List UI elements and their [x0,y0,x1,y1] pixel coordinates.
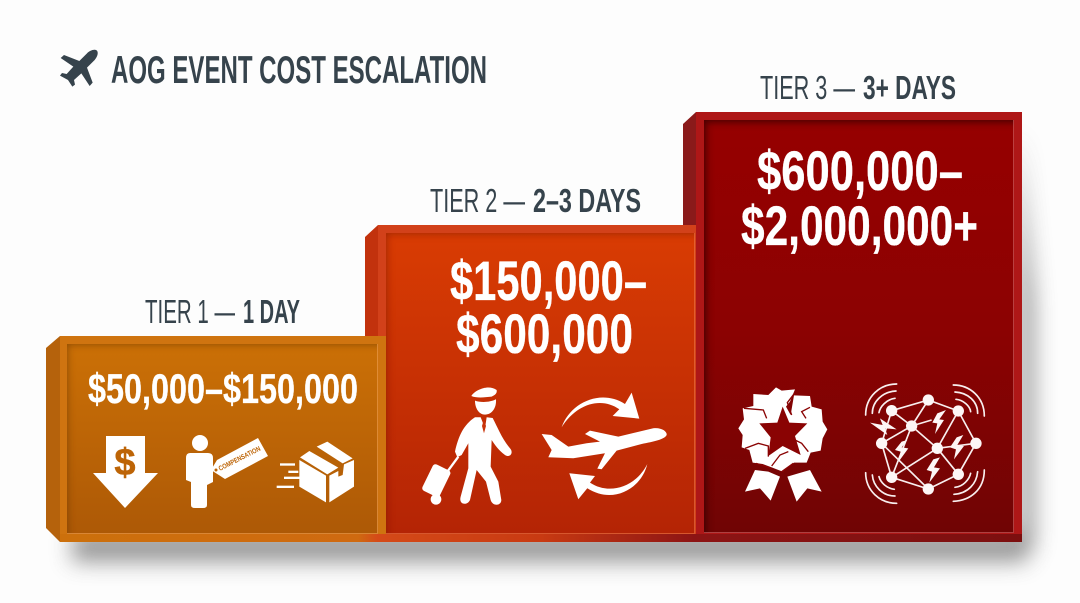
tier 1 frame [60,336,386,542]
icon: shipping box [277,442,354,502]
tier 3 amount: $2,000,000+ [741,194,978,257]
tier 2 amount: $150,000– [450,249,647,312]
drop shadow [72,130,1034,562]
tier 2 frame [378,225,696,542]
panel: tier 3 [683,76,1022,534]
tier 1 label: 1 DAY [243,293,300,330]
tier 3 label: TIER 3 — [760,69,855,106]
tier 3 frame [696,112,1022,542]
tier 2 amount: $600,000 [456,302,633,365]
tier 2 amount [450,249,647,365]
icon: pilot with suitcase [421,387,512,505]
icon: airplane [60,50,98,87]
tier 1 side bevel [46,336,60,542]
tier 3 side bevel [683,112,696,226]
tier 2 label: 2–3 DAYS [533,182,641,219]
title text: AOG EVENT COST ESCALATION [111,49,487,92]
tier 2 label [430,182,641,219]
tier 3 amount: $600,000– [757,139,963,202]
icon: broken medal [738,387,827,502]
base strip [60,534,1022,542]
icon: disrupted network [866,384,984,503]
tier 2 side bevel [365,225,378,338]
tier 3 label: 3+ DAYS [863,69,956,106]
icon: person with compensation tag: COMPENSATION [218,446,262,473]
tier 2 label: TIER 2 — [430,182,525,219]
tier 3 amount [741,139,978,257]
icon: dollar down arrow [93,436,158,508]
tier 1 label: TIER 1 — [145,293,235,330]
panel: tier 2 [365,188,696,534]
icon: aircraft rotation [542,393,667,499]
panel: tier 1 [46,300,386,542]
icon: dollar down arrow: $ [114,442,136,484]
title [60,49,487,92]
icon: person with compensation tag [186,435,268,508]
tier 1 amount: $50,000–$150,000 [88,365,358,412]
